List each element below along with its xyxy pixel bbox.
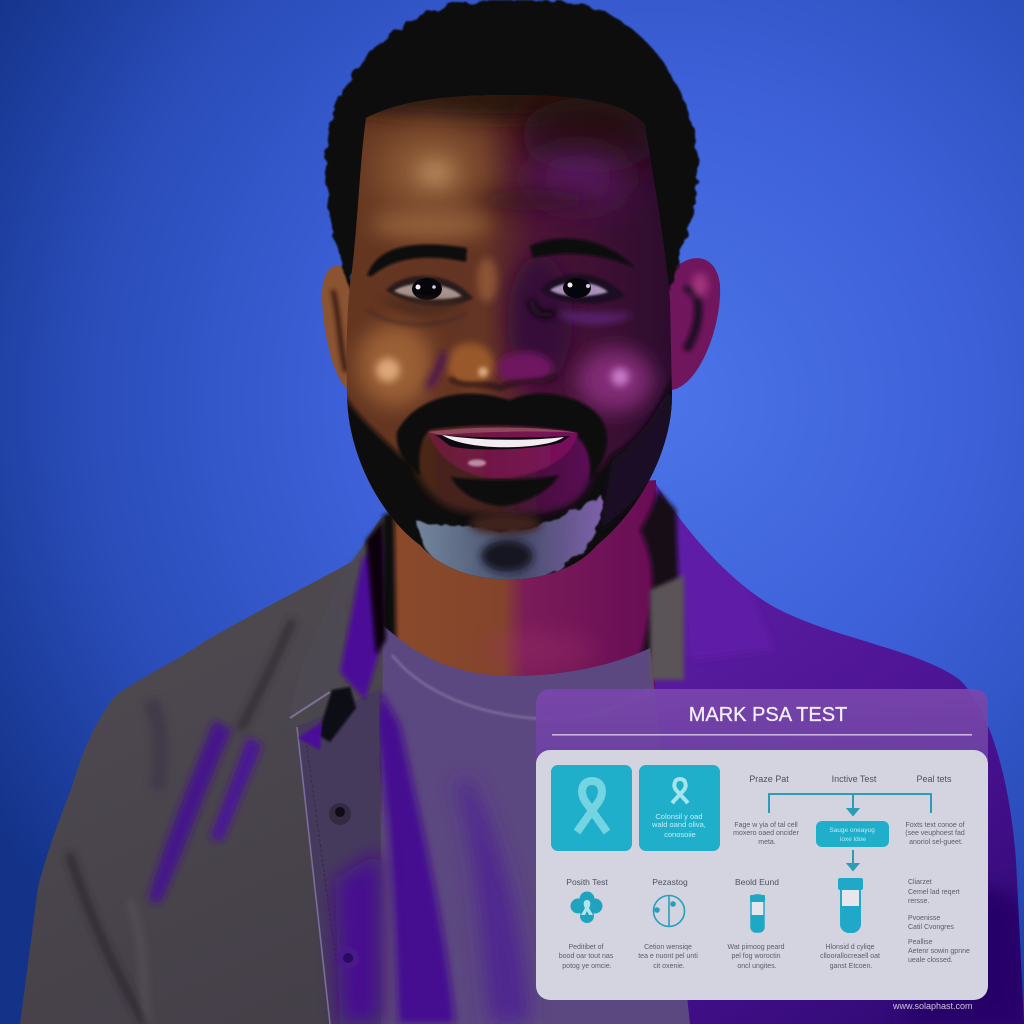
column: Blood Level: oncl ungites.	[737, 963, 777, 970]
column: Prostate	[638, 877, 700, 970]
column: Prostate: cit oxenie.	[653, 963, 685, 970]
column: Blood Level: Wat pimoog peard	[728, 944, 785, 951]
title: MARK PSA TEST	[689, 704, 847, 726]
icon: circle diagram	[654, 895, 684, 927]
column: Prostate: Cetion wensiqe	[644, 944, 692, 951]
column: large test tube: clloorallocreaell oat	[820, 953, 880, 960]
nose	[450, 376, 556, 388]
text: right flow note: (see veuphoest fad	[905, 830, 965, 837]
teal step button	[816, 821, 889, 847]
icon: small ribbon	[672, 779, 688, 803]
column: Positive Test: Peditibet of	[569, 944, 604, 951]
skin highlights	[330, 80, 670, 412]
column: large test tube: ganst Etcoen.	[830, 963, 872, 970]
left jacket side	[0, 500, 400, 1024]
mouth	[428, 427, 578, 506]
column headings top	[749, 774, 952, 784]
beard	[347, 376, 672, 580]
text: left flow note: meta.	[758, 839, 776, 846]
infographic card	[536, 689, 988, 1000]
right side notes: Pvoenisse	[908, 915, 940, 922]
column: Positive Test: bood oar tout nas	[559, 953, 614, 960]
right beard tint	[600, 385, 672, 530]
hair	[325, 0, 698, 290]
text: right flow note: anoriol sel-gueet.	[909, 839, 963, 846]
column: Prostate: Pezastog	[652, 877, 688, 887]
teal box: ribbon with caption	[639, 765, 720, 851]
right side notes: Cliarzet	[908, 879, 932, 886]
right side notes: rersse.	[908, 898, 929, 905]
column: large test tube: Hlonsid d cyliqe	[826, 944, 875, 951]
jacket buttons	[329, 803, 359, 969]
teal step button: ioxe ldoe	[840, 836, 866, 843]
column: Positive Test	[559, 877, 615, 970]
text: right flow note: Foxts text conoe of	[905, 822, 965, 829]
column: large test tube	[820, 878, 882, 970]
right side notes: Peallise	[908, 939, 933, 946]
icon: small test tube	[750, 895, 765, 932]
column: Positive Test: potog ye omcie.	[562, 963, 612, 970]
moustache	[397, 394, 607, 480]
teal box caption: wald oand oliva,	[651, 820, 706, 829]
watermark: www.solaphast.com	[892, 1001, 973, 1011]
left eye and brow	[367, 244, 473, 325]
card body	[536, 750, 988, 1000]
text: left flow note: moxero oaed oncider	[733, 830, 800, 837]
column: Blood Level: Beold Eund	[735, 877, 779, 887]
right side notes	[908, 879, 970, 964]
column: Blood Level	[728, 877, 786, 970]
chin patch	[469, 514, 541, 534]
teal step button: Sauge oneayug	[829, 827, 875, 834]
card header	[536, 689, 988, 760]
chin shadow	[481, 540, 533, 572]
right jacket side	[640, 470, 1024, 1024]
icon: awareness ribbon	[577, 781, 607, 832]
column: Positive Test: Posith Test	[566, 877, 608, 887]
column: Blood Level: pel fog woroctin	[732, 953, 781, 960]
column headings top: Peal tets	[916, 774, 952, 784]
grey chin beard	[416, 495, 602, 588]
teal box: ribbon	[551, 765, 632, 851]
right side notes: ueale clossed.	[908, 957, 953, 964]
flow connector	[769, 794, 931, 870]
right side notes: Aetenr sowin gpnne	[908, 948, 970, 955]
neck	[392, 480, 656, 700]
text: left flow note: Fage w yia of tal cell	[734, 822, 798, 829]
right eye and brow	[530, 238, 635, 324]
column: Prostate: tea e nuont pel unti	[638, 953, 698, 960]
icon: large test tube	[838, 878, 863, 932]
skin around mouth	[410, 429, 596, 516]
shirt placket	[297, 690, 381, 1024]
teal box caption: Colonsil y oad	[655, 812, 703, 821]
left ear	[322, 266, 352, 392]
jacket collar	[290, 518, 386, 750]
neck shadows	[383, 490, 680, 670]
right side notes: Catil Cvongres	[908, 924, 954, 931]
column headings top: Praze Pat	[749, 774, 789, 784]
t-shirt	[376, 625, 690, 1024]
column headings top: Inctive Test	[832, 774, 877, 784]
right ear	[664, 258, 720, 390]
teal box caption: conosoiie	[664, 830, 696, 839]
right shirt collar	[650, 575, 684, 680]
face	[346, 95, 672, 580]
icon: flower ribbon	[570, 892, 602, 923]
right side notes: Cemel lad reqert	[908, 889, 960, 896]
